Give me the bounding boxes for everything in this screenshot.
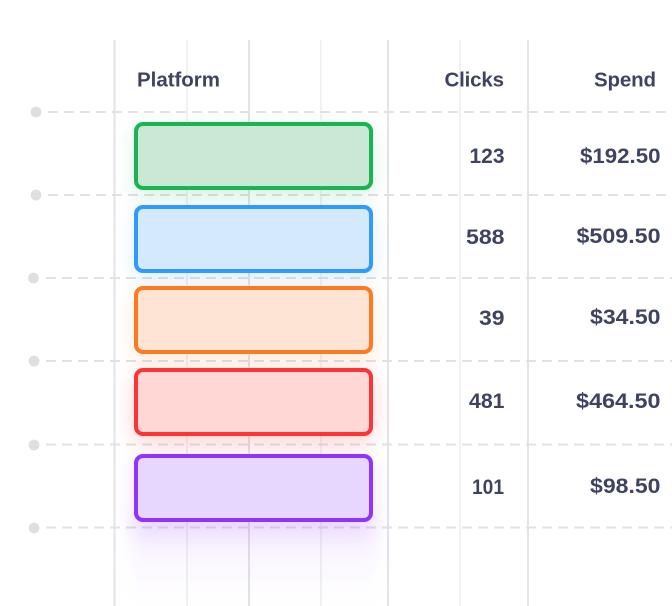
row bar: orange: [134, 286, 373, 354]
spend values: $464.50: [576, 389, 661, 413]
clicks values: 101: [472, 475, 504, 499]
row bar: purple: [134, 454, 373, 522]
clicks values: 123: [470, 144, 505, 168]
spend values: $98.50: [590, 474, 661, 498]
clicks values: 39: [479, 306, 505, 330]
column headers: Clicks: [444, 68, 504, 92]
column headers: Platform: [137, 68, 220, 92]
row marker dots: [28, 107, 41, 533]
clicks values: [466, 144, 505, 499]
row bar: red: [134, 368, 373, 436]
spend values: $192.50: [580, 144, 661, 168]
purple glow below the last row: [130, 520, 377, 604]
column headers: Spend: [594, 68, 656, 92]
spend values: [576, 144, 661, 498]
clicks values: 481: [469, 389, 505, 413]
spend values: $509.50: [576, 224, 661, 248]
spend values: $34.50: [590, 305, 661, 329]
row bar: green: [134, 122, 373, 190]
column headers: [137, 68, 656, 92]
clicks values: 588: [466, 225, 505, 249]
row bar: blue: [134, 204, 373, 272]
